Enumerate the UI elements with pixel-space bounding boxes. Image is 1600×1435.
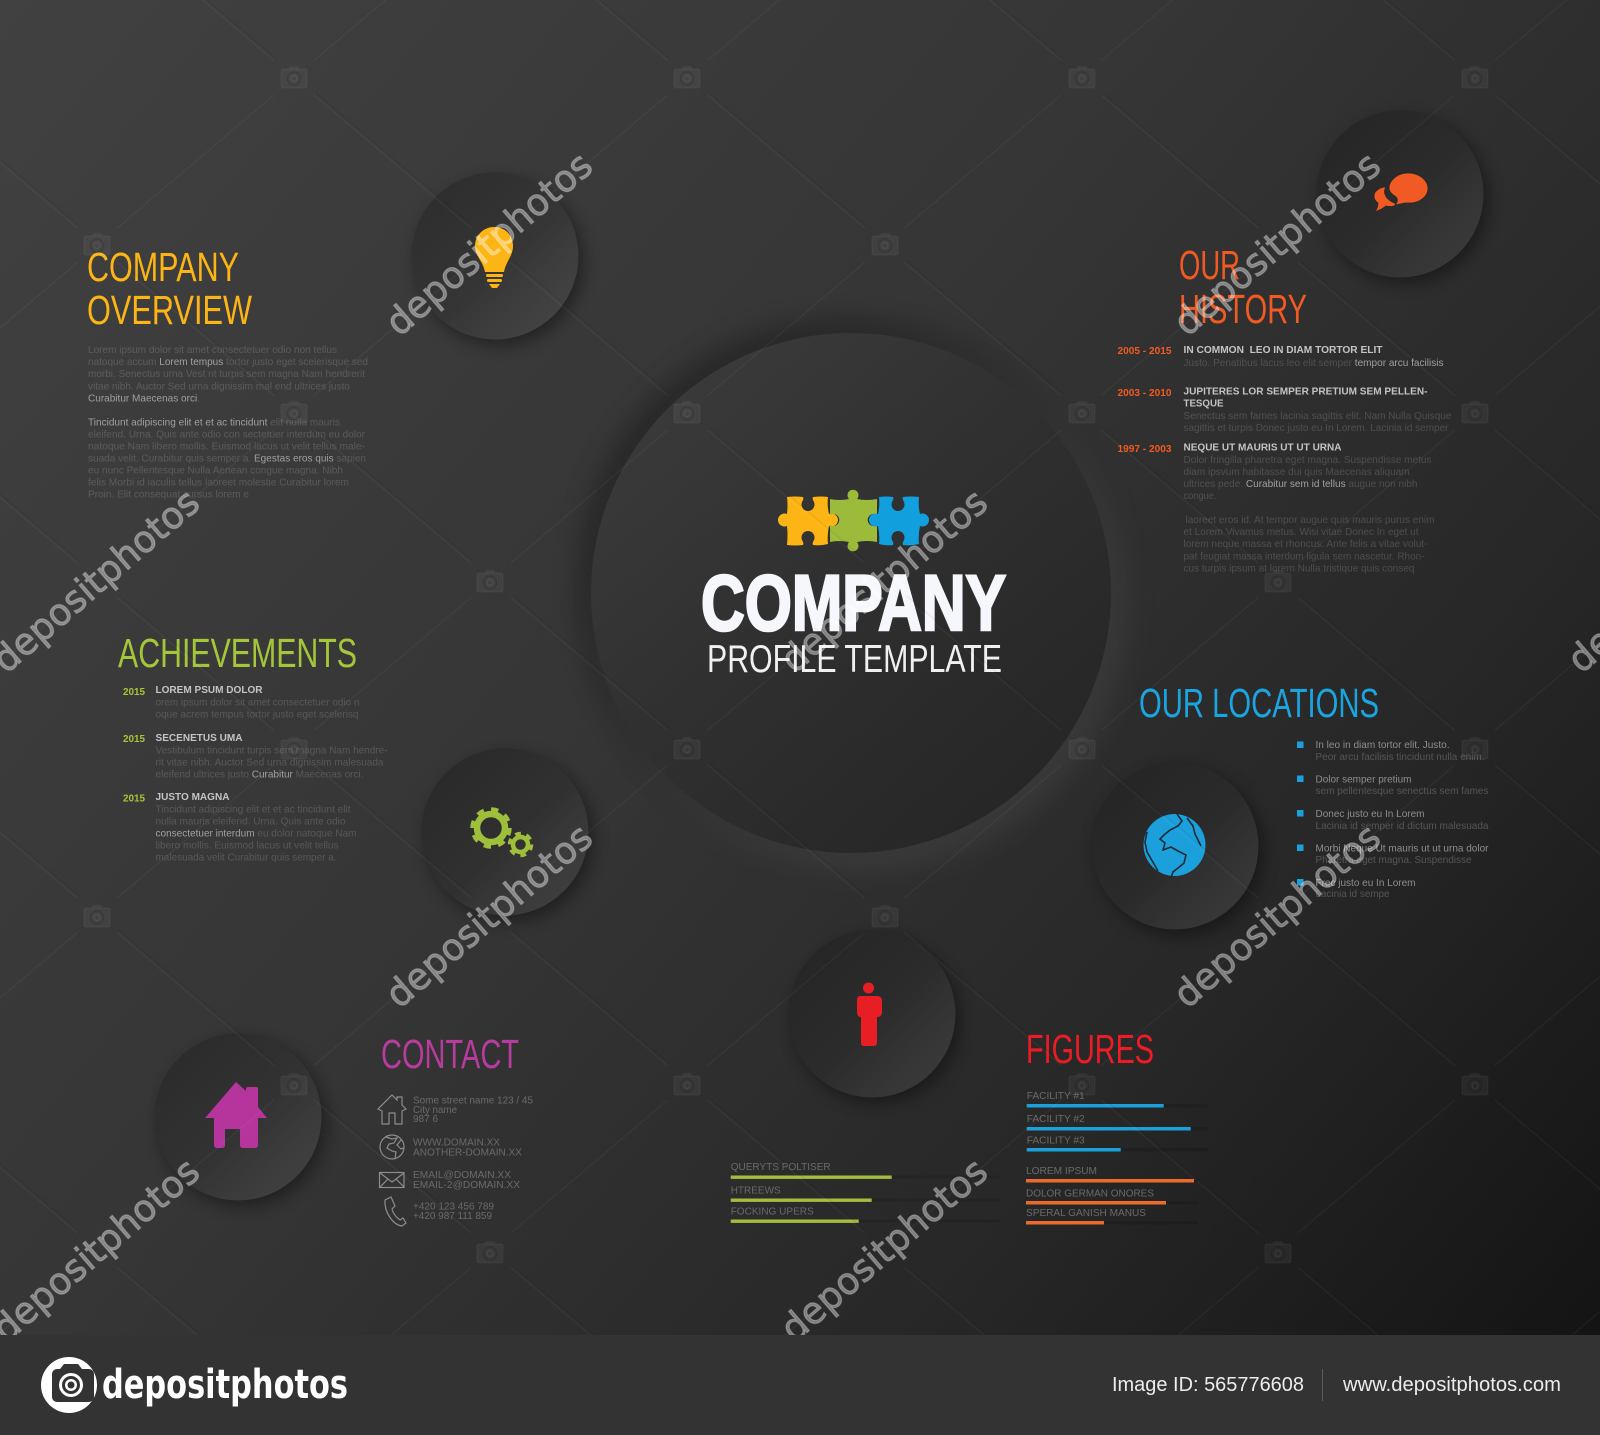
circle: history bbox=[1316, 110, 1489, 284]
watermark text repeated: depositphotos bbox=[772, 480, 996, 681]
icon: gears bbox=[472, 810, 532, 856]
history titles: JUPITERES LOR SEMPER PRETIUM SEM PELLEN- bbox=[1184, 386, 1428, 398]
history body text: Dolor fringilla pharetra eget magna. Suspendisse metus bbox=[1184, 454, 1432, 466]
circle: contact bbox=[154, 1034, 327, 1207]
circle: achievements bbox=[422, 748, 594, 922]
achievement titles bbox=[156, 684, 263, 803]
history body text: et Lorem Vivamus metus. Wisi vitae Donec In eget ut bbox=[1184, 526, 1419, 538]
facility labels: SPERAL GANISH MANUS bbox=[1026, 1207, 1146, 1219]
history titles: TESQUE bbox=[1184, 398, 1224, 410]
location details: Peor arcu facilisis tincidunt nulla enim. bbox=[1316, 751, 1484, 763]
contact text lines bbox=[413, 1094, 533, 1222]
title: COMPANY bbox=[701, 558, 1006, 647]
overview body text: eu nunc Pellentesque Nulla Aenean congue magna. Nibh bbox=[88, 464, 343, 476]
achievement body text: Tincidunt adipiscing elit et et ac tincidunt elit bbox=[156, 804, 351, 816]
bars: orange bbox=[1026, 1179, 1194, 1224]
watermark text repeated: depositphotos bbox=[1165, 815, 1389, 1016]
history body text: laoreet eros id. At tempor augue quis mauris purus enim bbox=[1186, 514, 1435, 526]
main center circle bbox=[579, 321, 1126, 869]
achievement body text: rit vitae nibh. Auctor Sed urna dignissim malesuada bbox=[156, 756, 384, 768]
location details: Lacinia id semper id dictum malesuada bbox=[1316, 820, 1489, 832]
heading: company overview: COMPANY bbox=[87, 244, 239, 290]
history body text: Justo. Penatibus lacus leo elit semper tempor arcu facilisis bbox=[1184, 357, 1444, 369]
location details: Lacinia id sempe bbox=[1316, 888, 1390, 900]
icon: globe bbox=[1144, 814, 1206, 878]
watermark text repeated: depositphotos bbox=[772, 1149, 996, 1350]
facility labels: LOREM IPSUM bbox=[1026, 1165, 1097, 1177]
title bbox=[701, 558, 1006, 681]
panel: bottom left bars bbox=[731, 1161, 1000, 1223]
heading: figures: FIGURES bbox=[1026, 1026, 1154, 1072]
overview body text: felis Morbi id iaculis tellus laoreet molestie Curabitur lorem bbox=[88, 476, 349, 488]
achievement body text: nulla mauris eleifend. Urna. Quis ante odio bbox=[156, 816, 346, 828]
panel: contact bbox=[378, 1031, 533, 1226]
icon: house bbox=[205, 1082, 267, 1148]
contact text lines: Some street name 123 / 45 bbox=[413, 1094, 533, 1106]
footer logo text: depositphotos bbox=[102, 1362, 348, 1408]
history years: 2003 - 2010 bbox=[1118, 387, 1172, 399]
contact text lines: WWW.DOMAIN.XX bbox=[413, 1136, 500, 1148]
achievement body text: eleifend ultrices justo Curabitur Maecenas orci. bbox=[156, 768, 364, 780]
puzzle piece yellow bbox=[778, 496, 838, 546]
panel: our locations bbox=[1139, 680, 1489, 900]
achievement years: 2015 bbox=[123, 686, 145, 698]
location names: Frec justo eu In Lorem bbox=[1316, 877, 1416, 889]
history body text: cus turpis ipsum at lorem Nulla tristique quis conseq bbox=[1184, 562, 1415, 574]
contact text lines: +420 987 111 859 bbox=[413, 1210, 492, 1222]
location names: Dolor semper pretium bbox=[1316, 774, 1412, 786]
footer url: www.depositphotos.com bbox=[1342, 1374, 1561, 1396]
contact text lines: ANOTHER-DOMAIN.XX bbox=[413, 1146, 522, 1158]
heading: contact: CONTACT bbox=[381, 1031, 519, 1077]
overview body text: Lorem ipsum dolor sit amet consectetuer odio non tellus bbox=[88, 344, 337, 356]
overview body text bbox=[88, 344, 368, 500]
watermark text repeated: depositphotos bbox=[377, 143, 601, 344]
achievement titles: LOREM PSUM DOLOR bbox=[156, 684, 263, 696]
achievement body text: malesuada velit Curabitur quis semper a. bbox=[156, 852, 336, 864]
heading: our history: OUR bbox=[1179, 242, 1240, 288]
bar labels bbox=[731, 1161, 831, 1218]
achievement body text: libero mollis. Euismod lacus ut velit tellus bbox=[156, 840, 338, 852]
overview body text: Tincidunt adipiscing elit et et ac tincidunt elit nulla mauris bbox=[88, 416, 340, 428]
achievement titles: SECENETUS UMA bbox=[156, 732, 243, 744]
bar labels: HTREEWS bbox=[731, 1184, 781, 1196]
bar labels: QUERYTS POLTISER bbox=[731, 1161, 831, 1173]
overview body text: Curabitur Maecenas orci. bbox=[88, 392, 200, 404]
achievement years: 2015 bbox=[123, 792, 145, 804]
panel: figures bbox=[1026, 1026, 1208, 1224]
footer image id: Image ID: 565776608 bbox=[1112, 1374, 1304, 1396]
achievement body text: oque acrem tempus tortor justo eget scelerisq bbox=[156, 708, 359, 720]
achievement years: 2015 bbox=[123, 733, 145, 745]
location bullets bbox=[1297, 742, 1304, 886]
facility labels: FACILITY #3 bbox=[1027, 1134, 1085, 1146]
history years: 2005 - 2015 bbox=[1118, 345, 1172, 357]
circle: locations bbox=[1092, 762, 1264, 936]
facility labels: DOLOR GERMAN ONORES bbox=[1026, 1188, 1154, 1200]
watermark text repeated: depositphotos bbox=[1165, 143, 1389, 344]
puzzle piece green bbox=[830, 490, 877, 551]
overview body text: eleifend. Urna. Quis ante odio con sectetuer interdum eu dolor bbox=[88, 428, 365, 440]
history body text: lorem neque massa et rhoncus. Ante felis a vitae volut- bbox=[1184, 538, 1428, 550]
icon: speech bubbles bbox=[1374, 173, 1428, 211]
achievement body text: orem ipsum dolor sit amet consectetuer odio n bbox=[156, 696, 360, 708]
icon: person bbox=[857, 982, 882, 1046]
history years bbox=[1118, 345, 1172, 455]
achievement body text: Vestibulum tincidunt turpis sem magna Nam hendre- bbox=[156, 744, 388, 756]
history body text bbox=[1184, 357, 1452, 574]
location names: Donec justo eu In Lorem bbox=[1316, 808, 1425, 820]
overview body text: natoque accum Lorem tempus tortor justo eget scelerisque sed bbox=[88, 356, 368, 368]
achievement years bbox=[123, 686, 145, 804]
heading: our history bbox=[1179, 242, 1307, 332]
icon: outline phone bbox=[385, 1197, 406, 1226]
circle: figures bbox=[788, 930, 961, 1104]
heading: our history: HISTORY bbox=[1179, 286, 1307, 332]
overview body text: suada velit. Curabitur quis semper a. Egestas eros quis sapien bbox=[88, 452, 366, 464]
icon: light bulb bbox=[475, 227, 513, 288]
location details bbox=[1316, 751, 1489, 900]
icon: puzzle logo bbox=[778, 490, 929, 551]
contact text lines: EMAIL-2@DOMAIN.XX bbox=[413, 1179, 520, 1191]
contact text lines: City name bbox=[413, 1104, 457, 1116]
watermark cameras bbox=[84, 66, 1488, 1263]
history years: 1997 - 2003 bbox=[1118, 443, 1172, 455]
achievement body text: consectetuer interdum eu dolor natoque Nam bbox=[156, 828, 357, 840]
facility labels bbox=[1026, 1090, 1154, 1219]
history titles bbox=[1184, 344, 1428, 454]
overview body text: Proin. Elit consequat cursus lorem e bbox=[88, 488, 249, 500]
history body text: sagittis et turpis Donec justo eu In Lorem. Lacinia id semper bbox=[1184, 422, 1449, 434]
achievement body text bbox=[156, 696, 388, 864]
icon: outline house bbox=[378, 1095, 406, 1124]
heading: achievements: ACHIEVEMENTS bbox=[118, 630, 357, 676]
icon: outline envelope bbox=[380, 1172, 404, 1188]
footer logo camera bbox=[41, 1357, 97, 1413]
bars: green bbox=[731, 1176, 892, 1223]
location names: In leo in diam tortor elit. Justo. bbox=[1316, 739, 1450, 751]
overview body text: morbi. Senectus urna Vest nt turpis sem magna Nam hendrerit bbox=[88, 368, 365, 380]
figure bar tracks bbox=[1026, 1104, 1208, 1224]
contact text lines: +420 123 456 789 bbox=[413, 1200, 494, 1212]
icon: outline globe bbox=[380, 1135, 404, 1159]
location details: Pharetra eget magna. Suspendisse bbox=[1316, 854, 1472, 866]
achievement titles: JUSTO MAGNA bbox=[156, 791, 230, 803]
history body text: Senectus sem fames lacinia sagittis elit. Nam Nulla Quisque bbox=[1184, 410, 1452, 422]
puzzle piece blue bbox=[869, 496, 929, 545]
heading: company overview: OVERVIEW bbox=[87, 287, 252, 333]
title: PROFILE TEMPLATE bbox=[707, 638, 1002, 681]
bar labels: FOCKING UPERS bbox=[731, 1206, 814, 1218]
panel: achievements bbox=[118, 630, 388, 864]
overview body text: vitae nibh. Auctor Sed urna dignissim mal end ultrices justo bbox=[88, 380, 350, 392]
facility labels: FACILITY #2 bbox=[1027, 1113, 1085, 1125]
panel: our history bbox=[1118, 242, 1452, 574]
circle: company overview bbox=[412, 172, 584, 346]
overview body text: natoque Nam libero mollis. Euismod lacus ut velit tellus male- bbox=[88, 440, 365, 452]
history body text: congue. bbox=[1184, 490, 1216, 502]
bars: blue bbox=[1027, 1104, 1191, 1152]
history titles: NEQUE UT MAURIS UT UT URNA bbox=[1184, 442, 1342, 454]
location names: Morbi Neque Ut mauris ut ut urna dolor bbox=[1316, 842, 1489, 854]
facility labels: FACILITY #1 bbox=[1027, 1090, 1085, 1102]
location details: sem pellentesque senectus sem fames bbox=[1316, 785, 1488, 797]
location names bbox=[1316, 739, 1489, 889]
heading: our locations: OUR LOCATIONS bbox=[1139, 680, 1379, 726]
history body text: pat feugiat massa interdum ligula sem nascetur. Rhon- bbox=[1184, 550, 1425, 562]
watermark text repeated: depositphotos bbox=[377, 815, 601, 1016]
heading: company overview bbox=[87, 244, 252, 333]
contact text lines: EMAIL@DOMAIN.XX bbox=[413, 1169, 511, 1181]
footer bar bbox=[0, 1335, 1600, 1435]
panel: company overview bbox=[87, 244, 368, 500]
history body text: diam ipsvum habitasse dui quis Maecenas aliquam bbox=[1184, 466, 1410, 478]
bar tracks bbox=[731, 1176, 1000, 1222]
contact text lines: 987 6 bbox=[413, 1113, 438, 1125]
history titles: IN COMMON LEO IN DIAM TORTOR ELIT bbox=[1184, 344, 1383, 356]
history body text: ultrices pede. Curabitur sem id tellus augue non nibh bbox=[1184, 478, 1418, 490]
